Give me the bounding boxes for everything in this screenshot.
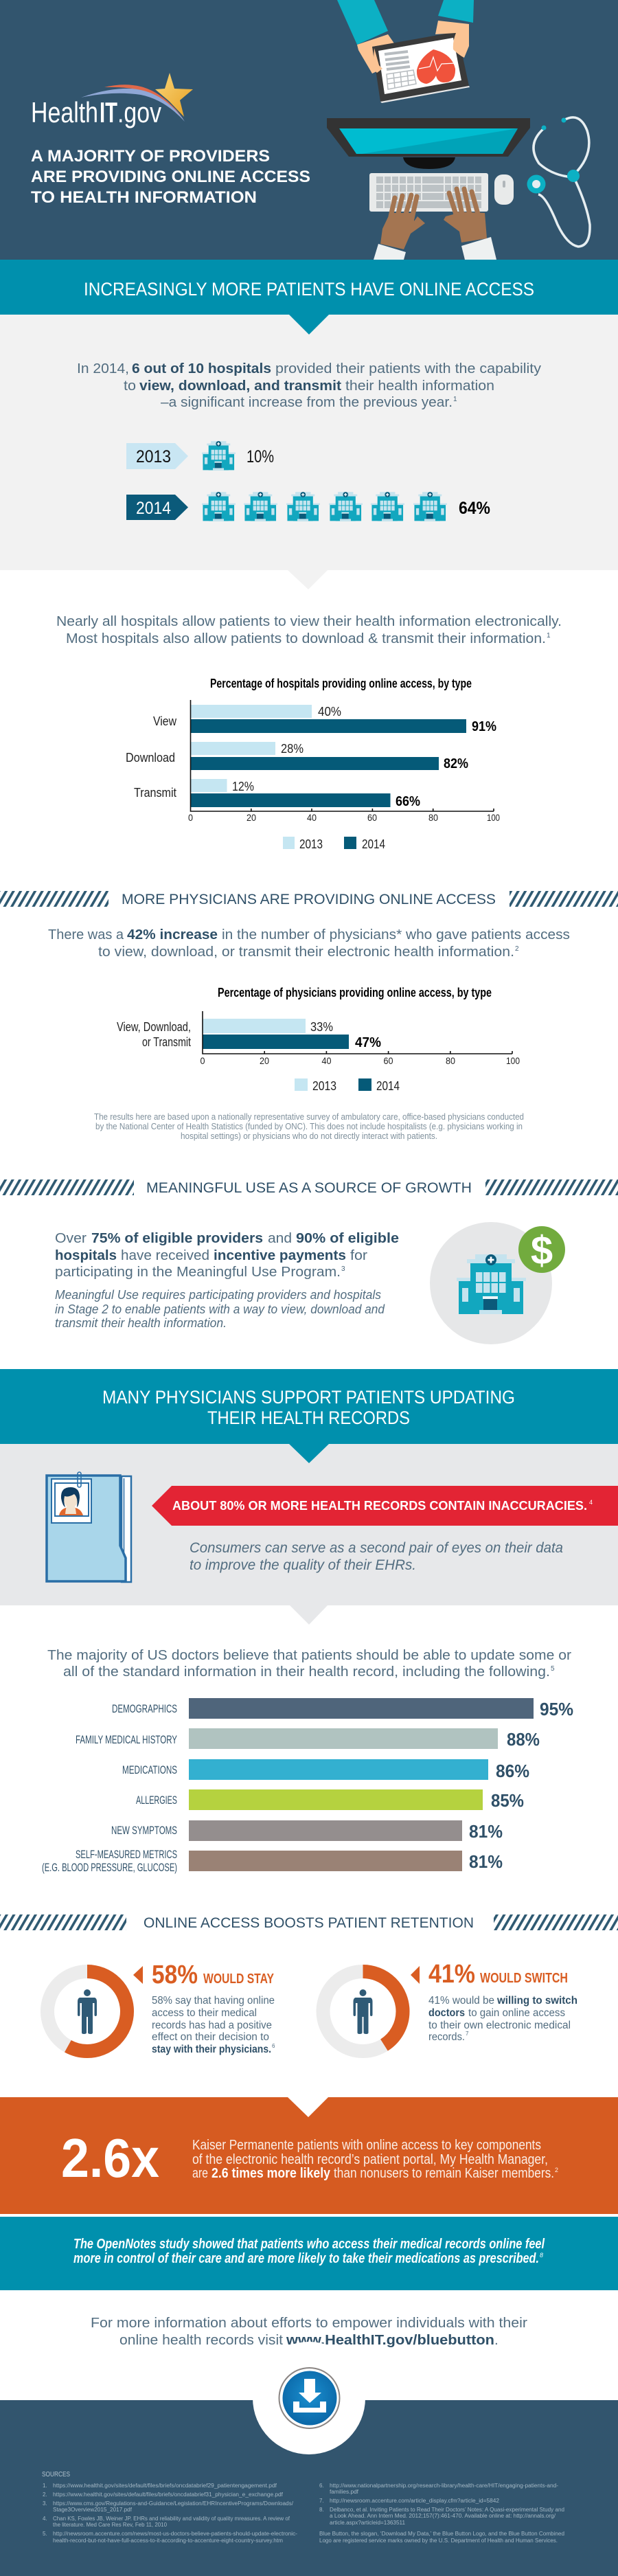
bar chart: information doctors support updating: (E.G. BLOOD PRESSURE, GLUCOSE)	[42, 1861, 177, 1874]
bar chart: physicians: 20	[260, 1055, 269, 1066]
sources list: https://www.healthit.gov/sites/default/files/briefs/oncdatabrief31_physician_e_exchange.pdf	[53, 2492, 284, 2498]
title: TO HEALTH INFORMATION	[31, 188, 257, 207]
stat: 58% would stay: effect on their decision to	[152, 2031, 269, 2043]
stat: 41% would switch: 7	[466, 2031, 469, 2037]
intro text	[77, 361, 542, 410]
text: meaningful use definition: Meaningful Use requires participating providers and hospitals	[55, 1288, 381, 1302]
panel: OpenNotes study	[0, 2217, 618, 2290]
section heading: meaningful use	[0, 1179, 618, 1196]
icon: medical record folder	[47, 1472, 131, 1582]
section banner: many physicians support	[0, 1369, 618, 1444]
stat: 41% would switch: 41%	[428, 1960, 475, 1989]
intro text: provided their patients with the capability	[275, 361, 542, 376]
sources list: the literature. Med Care Res Rev, Feb 11, 2010	[53, 2522, 168, 2528]
sources list: http://newsroom.accenture.com/article_display.cfm?article_id=5842	[330, 2498, 500, 2504]
header panel	[0, 0, 618, 260]
stat: 58% would stay: access to their medical	[152, 2007, 257, 2019]
sources list: article.aspx?articleid=1363511	[330, 2520, 406, 2526]
bar chart: information doctors support updating: 81%	[469, 1851, 503, 1872]
intro text: 6 out of 10 hospitals	[132, 361, 271, 376]
bar chart: information doctors support updating: ALLERGIES	[136, 1794, 177, 1807]
callout: inaccuracies banner	[152, 1486, 618, 1526]
bar chart: hospitals by type: 0	[188, 812, 193, 823]
sources list: 3.	[43, 2500, 47, 2507]
text: Kaiser patients: Kaiser Permanente patients with online access to key components	[192, 2138, 541, 2153]
bar chart: hospitals by type: 82%	[444, 756, 468, 771]
text: incentive payments: hospitals	[55, 1247, 117, 1263]
logo: HealthIT.gov: IT	[100, 96, 117, 128]
text: Kaiser patients: 2	[555, 2167, 558, 2173]
bar chart: hospitals by type: Transmit	[134, 785, 176, 800]
bar chart: hospitals by type	[126, 677, 500, 851]
callout: inaccuracies banner: ABOUT 80% OR MORE HEALTH RECORDS CONTAIN INACCURACIES.	[172, 1499, 587, 1513]
text: incentive payments: Over	[55, 1230, 87, 1246]
pictogram row 2014	[126, 492, 490, 521]
bar chart: hospitals by type: View	[153, 714, 177, 728]
text: incentive payments: and	[268, 1230, 292, 1246]
text: incentive payments	[55, 1230, 399, 1280]
sources list: 8.	[319, 2507, 324, 2513]
intro text: to	[124, 378, 136, 394]
text: more information	[91, 2315, 527, 2348]
sources list: https://www.cms.gov/Regulations-and-Guidance/Legislation/EHRIncentivePrograms/Downloads/	[53, 2500, 294, 2507]
bar chart: physicians: 33%	[310, 1019, 333, 1034]
sources list: 6.	[319, 2483, 324, 2489]
sources list: Stage3Overview2015_2017.pdf	[53, 2507, 133, 2513]
text: meaningful use definition: transmit their health information.	[55, 1316, 227, 1330]
logo: HealthIT.gov	[31, 73, 193, 128]
sources list: https://www.healthit.gov/sites/default/files/briefs/oncdatabrief29_patientengagement.pdf	[53, 2483, 277, 2489]
bar chart: physicians: 60	[383, 1055, 393, 1066]
chart title: Percentage of physicians providing online access, by type	[218, 986, 492, 999]
text: 42% increase: to view, download, or transmit their electronic health information.	[98, 944, 514, 960]
text: majority of US doctors: 5	[551, 1665, 555, 1673]
sources list: 5.	[43, 2531, 47, 2537]
bar chart: physicians: or Transmit	[142, 1035, 191, 1049]
text: nearly all hospitals: Nearly all hospitals allow patients to view their health information electronically.	[56, 613, 562, 629]
text: second pair of eyes	[190, 1540, 563, 1573]
bar chart: physicians: 40	[321, 1055, 332, 1066]
text: Kaiser patients: of the electronic health record’s patient portal, My Health Manager,	[192, 2152, 548, 2167]
callout: inaccuracies banner: 4	[589, 1499, 593, 1506]
chart title: Percentage of hospitals providing online access, by type	[210, 677, 472, 690]
illustration: hands holding tablet	[337, 0, 474, 103]
bar chart: hospitals by type: 20	[247, 812, 256, 823]
bar chart: hospitals by type: 66%	[396, 794, 420, 809]
illustration: typing hands	[374, 189, 496, 260]
stat: 58% would stay: 58%	[152, 1961, 198, 1989]
sources list: Chan KS, Fowles JB, Weiner JP. EHRs and reliability and validity of quality mreasures. A review of	[53, 2516, 290, 2522]
intro text: their health information	[345, 378, 494, 394]
bar chart: hospitals by type: 12%	[232, 779, 254, 793]
bar chart: information doctors support updating: SELF-MEASURED METRICS	[76, 1848, 177, 1861]
bar chart: physicians: 0	[201, 1055, 205, 1066]
stat: 41% would switch: records.	[428, 2031, 465, 2043]
bar chart: information doctors support updating: MEDICATIONS	[122, 1763, 177, 1776]
sources list: 7.	[319, 2498, 324, 2504]
sources list	[42, 2471, 564, 2544]
section heading: meaningful use: MEANINGFUL USE AS A SOURCE OF GROWTH	[146, 1180, 472, 1196]
bar chart: hospitals by type: 28%	[281, 741, 304, 756]
bar chart: physicians	[117, 986, 520, 1093]
text: second pair of eyes: Consumers can serve as a second pair of eyes on their data	[190, 1540, 563, 1556]
text: 42% increase: in the number of physicians* who gave patients access	[222, 927, 570, 942]
illustration: stethoscope	[527, 117, 590, 247]
text: incentive payments: 3	[341, 1265, 345, 1273]
section heading: more physicians	[0, 891, 618, 907]
bar chart: information doctors support updating: 86%	[496, 1761, 529, 1781]
text: 42% increase: 2	[515, 945, 519, 953]
sources list: 1.	[43, 2483, 47, 2489]
text: incentive payments: 75% of eligible providers	[91, 1230, 263, 1246]
pictogram row 2014: 64%	[459, 499, 490, 518]
text: Kaiser patients: 2.6 times more likely	[211, 2166, 331, 2181]
intro text: 1	[453, 396, 457, 403]
text: nearly all hospitals: 1	[547, 632, 551, 640]
text: nearly all hospitals	[56, 613, 562, 646]
text: more information: www.HealthIT.gov/bluebutton	[286, 2332, 494, 2348]
bar chart: physicians: 80	[446, 1055, 455, 1066]
icon: blue button download	[279, 2367, 341, 2429]
pictogram row 2013	[126, 441, 274, 470]
legend: 2014	[376, 1078, 400, 1093]
illustration: keyboard and mouse	[369, 173, 514, 212]
bar chart: information doctors support updating: 85%	[491, 1790, 524, 1811]
title	[31, 147, 310, 207]
bar chart: hospitals by type: 40	[307, 812, 317, 823]
text: Kaiser patients	[192, 2138, 558, 2181]
bar chart: hospitals by type: 40%	[318, 704, 341, 719]
legend	[283, 837, 385, 851]
sources list: 4.	[43, 2516, 47, 2522]
sources list: 2.	[43, 2492, 47, 2498]
sources list: SOURCES	[42, 2471, 70, 2478]
panel: OpenNotes study: 8	[540, 2252, 543, 2259]
icon: hospital with dollar: $	[531, 1228, 553, 1273]
bar chart: physicians: View, Download,	[117, 1019, 191, 1034]
stat: 58% would stay: stay with their physicians.	[152, 2044, 271, 2055]
panel: hospital capability	[0, 315, 618, 570]
text: meaningful use definition	[55, 1288, 385, 1330]
logo: HealthIT.gov: .gov	[117, 96, 161, 128]
footnote: survey method	[94, 1112, 524, 1141]
sources list: Logo are registered service marks owned by the U.S. Department of Health and Human Services.	[319, 2538, 558, 2544]
sources list: http://newsroom.accenture.com/news/most-us-doctors-believe-patients-should-update-electronic-	[53, 2531, 297, 2537]
title: A MAJORITY OF PROVIDERS	[31, 147, 270, 166]
arrow: grey pointer	[288, 570, 328, 589]
bar chart: physicians: 100	[506, 1055, 520, 1066]
text: incentive payments: incentive payments	[214, 1247, 346, 1263]
text: nearly all hospitals: Most hospitals also allow patients to download & transmit their information.	[66, 631, 546, 646]
stat: 41% would switch: 41% would be	[428, 1995, 494, 2007]
legend: 2013	[312, 1078, 336, 1093]
bar chart: information doctors support updating: 88%	[507, 1729, 540, 1750]
bar chart: information doctors support updating: 81%	[469, 1821, 503, 1842]
footer panel	[0, 2342, 618, 2576]
section banner: many physicians support: MANY PHYSICIANS SUPPORT PATIENTS UPDATING	[102, 1387, 515, 1408]
donut chart: 58%	[47, 1971, 127, 2051]
panel: Kaiser 2.6x	[0, 2097, 618, 2214]
legend	[295, 1078, 400, 1093]
text: second pair of eyes: to improve the quality of their EHRs.	[190, 1557, 416, 1573]
text: majority of US doctors	[47, 1647, 571, 1680]
illustration: computer monitor	[327, 118, 530, 169]
section banner: many physicians support: THEIR HEALTH RECORDS	[207, 1408, 410, 1428]
sources list: health-record-but-not-have-full-access-to-it-according-to-accenture-eight-country-survey.htm	[53, 2538, 283, 2544]
text: majority of US doctors: all of the standard information in their health record, including the following.	[63, 1664, 550, 1680]
bar chart: information doctors support updating: FAMILY MEDICAL HISTORY	[76, 1733, 177, 1746]
bar chart: hospitals by type: 91%	[472, 719, 496, 734]
bar chart: information doctors support updating: 95%	[540, 1699, 573, 1719]
stat: 58% would stay: WOULD STAY	[203, 1971, 275, 1987]
stat: 41% would switch	[323, 1960, 577, 2051]
text: more information: online health records visit	[119, 2332, 283, 2348]
intro text: view, download, and transmit	[139, 378, 341, 394]
text: incentive payments: have received	[121, 1247, 209, 1263]
bar chart: information doctors support updating: DEMOGRAPHICS	[112, 1702, 177, 1715]
sources list: Blue Button, the slogan, ‘Download My Data,’ the Blue Button Logo, and the Blue Button Combined	[319, 2531, 564, 2537]
stat: 41% would switch: to their own electronic medical	[428, 2020, 571, 2031]
stat: 41% would switch: doctors	[428, 2007, 465, 2019]
footnote: survey method: The results here are based upon a nationally representative survey of ambulatory care, office-based physicians conducted	[94, 1112, 524, 1122]
text: 42% increase: 42% increase	[127, 927, 218, 942]
title: ARE PROVIDING ONLINE ACCESS	[31, 168, 310, 186]
bar chart: information doctors support updating: NEW SYMPTOMS	[111, 1824, 177, 1837]
logo: HealthIT.gov: Health	[31, 96, 98, 128]
text: 42% increase: There was a	[48, 927, 124, 942]
text: incentive payments: for	[350, 1247, 367, 1263]
donut chart: 41%	[323, 1971, 402, 2051]
icon: hospital with dollar	[430, 1222, 565, 1344]
sources list: Delbanco, et al. Inviting Patients to Read Their Doctors’ Notes: A Quasi-experimental Study and	[330, 2507, 564, 2513]
text: more information: .	[494, 2332, 499, 2348]
sources list: families.pdf	[330, 2489, 359, 2495]
text: Kaiser patients: than nonusers to remain Kaiser members.	[334, 2166, 554, 2181]
bar chart: hospitals by type: 60	[367, 812, 377, 823]
big number: 2.6x	[61, 2127, 159, 2189]
panel: inaccuracies	[0, 1444, 618, 1605]
text: Kaiser patients: are	[192, 2166, 208, 2181]
sources list: http://www.nationalpartnership.org/research-library/health-care/HIT/engaging-patients-and-	[330, 2483, 558, 2489]
intro text: –a significant increase from the previous year.	[161, 394, 453, 410]
legend: 2013	[299, 837, 323, 851]
stat: 58% would stay: 58% say that having online	[152, 1995, 275, 2007]
stat: 58% would stay: 6	[272, 2043, 275, 2049]
arrow: grey pointer	[290, 1605, 328, 1625]
sources list: a Look Ahead. Ann Intern Med. 2012;157(7):461-470. Available online at: http://annals.org/	[330, 2513, 556, 2519]
pictogram row 2013: 2013	[136, 447, 171, 466]
text: 42% increase	[48, 927, 570, 960]
text: incentive payments: participating in the Meaningful Use Program.	[55, 1264, 341, 1280]
stat: 58% would stay: records has had a positive	[152, 2020, 272, 2031]
section heading: patient retention: ONLINE ACCESS BOOSTS PATIENT RETENTION	[144, 1915, 474, 1931]
footnote: survey method: by the National Center of Health Statistics (funded by ONC). This does not include hospitalists (e.g. physicians working in	[95, 1122, 523, 1131]
text: more information: For more information about efforts to empower individuals with their	[91, 2315, 527, 2331]
legend: 2014	[362, 837, 385, 851]
bar chart: hospitals by type: 100	[487, 812, 500, 823]
text: meaningful use definition: in Stage 2 to enable patients with a way to view, download and	[55, 1302, 385, 1316]
pictogram row 2014: 2014	[136, 499, 171, 518]
bar chart: information doctors support updating	[42, 1698, 573, 1874]
stat: 58% would stay	[47, 1961, 275, 2055]
stat: 41% would switch: to gain online access	[468, 2007, 565, 2019]
text: incentive payments: 90% of eligible	[296, 1230, 399, 1246]
stat: 41% would switch: WOULD SWITCH	[480, 1971, 568, 1986]
section banner: increasingly more patients: INCREASINGLY MORE PATIENTS HAVE ONLINE ACCESS	[84, 279, 534, 300]
section banner: increasingly more patients	[0, 260, 618, 315]
bar chart: hospitals by type: Download	[126, 750, 175, 765]
bar chart: physicians: 47%	[355, 1035, 381, 1050]
section heading: patient retention	[0, 1914, 618, 1931]
intro text: In 2014,	[77, 361, 129, 376]
pictogram row 2013: 10%	[247, 447, 274, 466]
bar chart: hospitals by type: 80	[428, 812, 438, 823]
footnote: survey method: hospital settings) or physicians who do not directly interact with patients.	[181, 1131, 437, 1141]
text: majority of US doctors: The majority of US doctors believe that patients should be able to update some or	[47, 1647, 571, 1663]
section heading: more physicians: MORE PHYSICIANS ARE PROVIDING ONLINE ACCESS	[122, 892, 496, 907]
stat: 41% would switch: willing to switch	[496, 1995, 577, 2007]
